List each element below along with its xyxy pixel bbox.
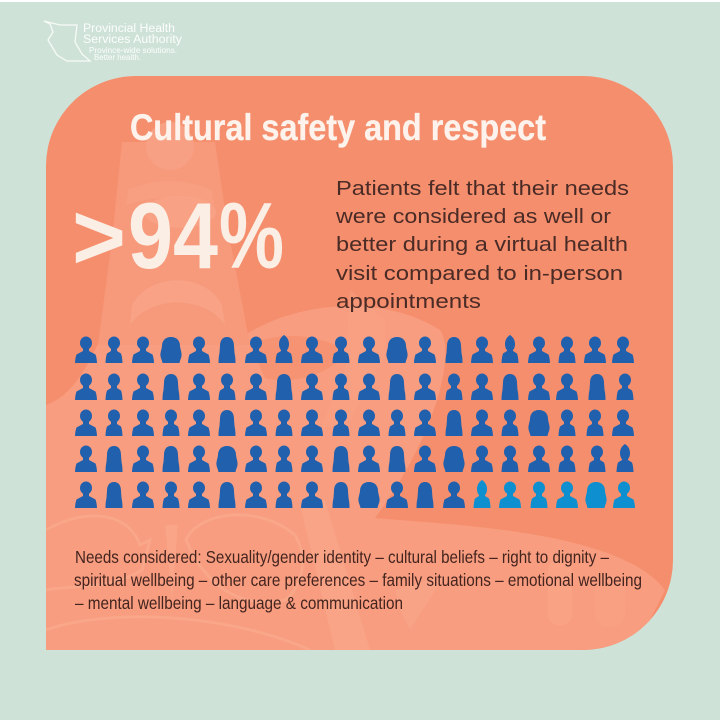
big statistic: > bbox=[72, 184, 126, 289]
description text: better during a virtual health bbox=[336, 233, 628, 256]
panel: cultural safety bbox=[46, 76, 673, 650]
description text: Patients felt that their needs bbox=[336, 177, 629, 200]
logo text: Provincial Health bbox=[83, 23, 175, 35]
description text: were considered as well or bbox=[335, 205, 611, 228]
logo: Provincial Health Services Authority bbox=[44, 21, 182, 62]
logo text: Services Authority bbox=[83, 34, 182, 46]
big statistic: % bbox=[219, 183, 284, 288]
footnote: needs considered: Needs considered: Sexuality/gender identity – cultural beliefs – right to dignity – bbox=[75, 547, 609, 567]
description text bbox=[335, 177, 629, 313]
description text: visit compared to in-person bbox=[336, 262, 623, 285]
row 5 bbox=[75, 480, 635, 508]
pictogram: 100 people, 94 dark and 6 light bbox=[75, 335, 635, 508]
title: Cultural safety and respect bbox=[130, 106, 546, 148]
footnote: needs considered: – mental wellbeing – language & communication bbox=[75, 593, 403, 613]
footnote: needs considered bbox=[74, 547, 642, 613]
row 2 bbox=[75, 374, 634, 400]
watermark: totem and formline art bbox=[46, 122, 665, 650]
big statistic bbox=[72, 183, 284, 289]
icon: BC map outline bbox=[44, 21, 90, 61]
logo text: Province-wide solutions. bbox=[89, 46, 177, 55]
logo text bbox=[83, 23, 182, 62]
row 3 bbox=[75, 410, 634, 436]
big statistic: 94 bbox=[128, 183, 218, 288]
row 1 bbox=[75, 335, 634, 363]
row 4 bbox=[75, 444, 634, 472]
description text: appointments bbox=[336, 290, 481, 313]
logo text: Better health. bbox=[94, 53, 141, 62]
footnote: needs considered: spiritual wellbeing – other care preferences – family situations – emotional wellbeing bbox=[74, 570, 642, 590]
